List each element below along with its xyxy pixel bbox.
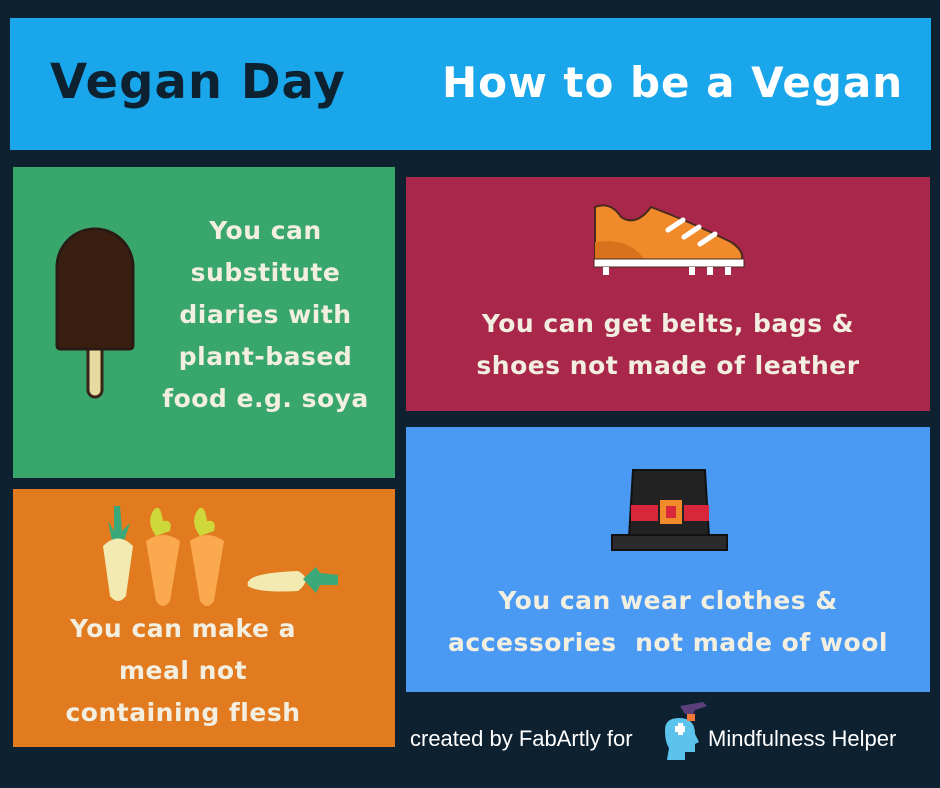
text: meal: You can make a (70, 614, 296, 643)
text: meal: containing flesh (65, 698, 301, 727)
title: Vegan Day: Vegan Day (50, 54, 346, 110)
icon: carrots (103, 506, 338, 606)
text: leather (476, 309, 860, 380)
text: substitute dairies: diaries with (179, 300, 352, 329)
panel: green dairy (13, 167, 395, 478)
text: substitute dairies (162, 216, 369, 413)
text: substitute dairies: food e.g. soya (162, 384, 369, 413)
text: substitute dairies: plant-based (179, 342, 352, 371)
panel: blue wool (406, 427, 930, 692)
text: leather: You can get belts, bags & (482, 309, 854, 338)
panel: red leather (406, 177, 930, 411)
text: meal: meal not (119, 656, 247, 685)
icon: ice lolly (56, 228, 134, 398)
text: substitute dairies: substitute (191, 258, 340, 287)
text: wool (448, 586, 888, 657)
footer credit: created by FabArtly for (410, 726, 633, 751)
icon: head logo (665, 702, 707, 760)
text: wool: accessories not made of wool (448, 628, 888, 657)
text: leather: shoes not made of leather (476, 351, 860, 380)
icon: hat (611, 469, 728, 551)
footer credit (410, 702, 896, 760)
text: substitute dairies: You can (209, 216, 322, 245)
subtitle: How to be a Vegan: How to be a Vegan (442, 58, 903, 107)
text: meal (65, 614, 301, 727)
panel: orange meal (13, 489, 395, 747)
icon: shoe (594, 204, 744, 275)
footer credit: Mindfulness Helper (708, 726, 896, 751)
text: wool: You can wear clothes & (498, 586, 838, 615)
header banner (10, 18, 931, 150)
